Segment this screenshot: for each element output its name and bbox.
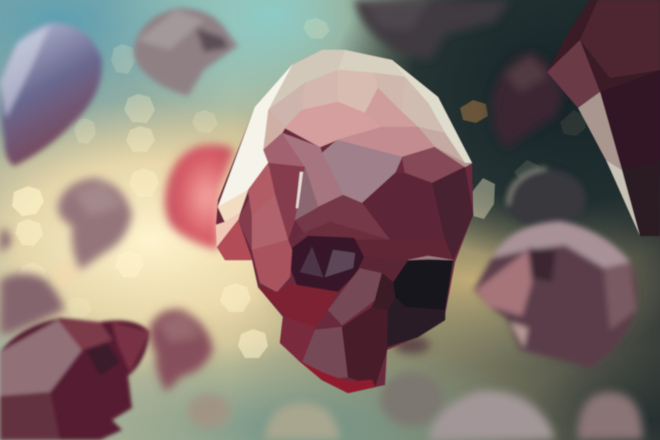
bokeh light spots: [12, 18, 586, 358]
background skull: right large: [474, 221, 637, 368]
background skull: right dark: [492, 52, 564, 148]
left eye socket: [290, 236, 364, 292]
background skull: red glowing: [165, 145, 234, 250]
main skull: [216, 50, 473, 393]
background skull: top centre: [134, 8, 238, 96]
cranium rim: [268, 50, 472, 163]
cranium pink facets: [263, 70, 465, 163]
brow and right side of the face: [288, 222, 453, 262]
background skull: bottom centre-left: [150, 309, 213, 392]
background skull: right small: [506, 168, 586, 229]
foreground skull: top right corner: [547, 0, 660, 236]
background skulls: bottom row: [187, 336, 643, 440]
background skull: far left: [0, 228, 64, 334]
cheek, nose and jaw facets: [252, 240, 445, 393]
background skull: bottom-left large: [0, 318, 150, 440]
background skull: blue top left: [0, 23, 102, 166]
background skull: left middle: [58, 178, 132, 270]
right eye socket: [393, 256, 453, 310]
main skull silhouette: [216, 50, 473, 393]
left lit facets: [216, 65, 292, 260]
cranium mauve and dark facets: [238, 133, 473, 260]
background skull: top right dark: [354, 0, 510, 60]
